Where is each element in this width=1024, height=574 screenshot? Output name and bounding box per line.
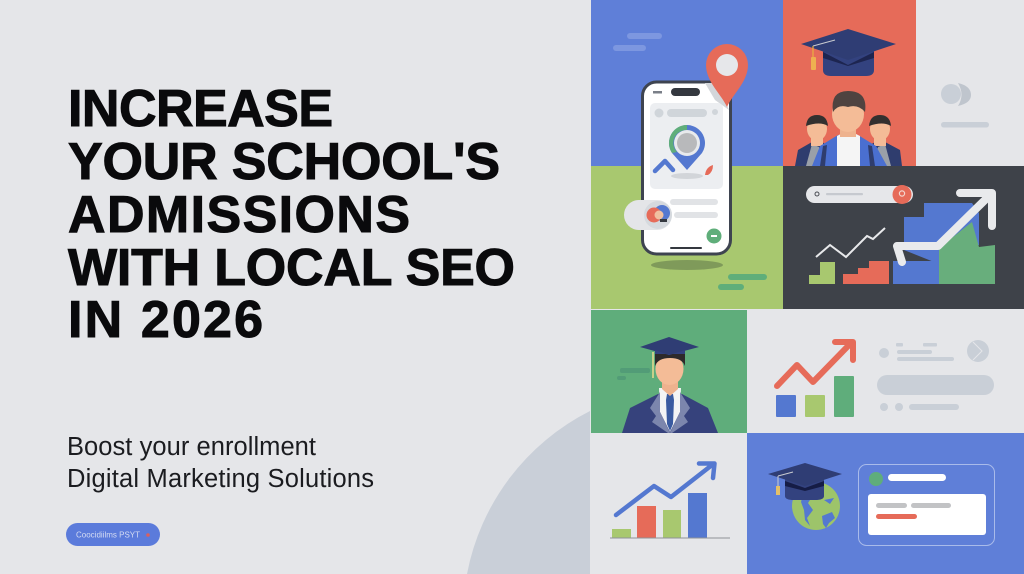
listing card [858, 464, 994, 546]
title: YOUR SCHOOL'S [68, 133, 500, 191]
analytics placeholder [877, 340, 994, 411]
line chart [816, 228, 885, 257]
icon: red location pin [706, 44, 748, 107]
panel: light gray top-right [916, 0, 1024, 166]
blue base [893, 261, 939, 284]
panel: light bottom chart background [591, 433, 747, 574]
tassel [652, 352, 654, 378]
tie [666, 394, 674, 431]
call to action button: Coocidiilms PSYT [76, 530, 140, 540]
blue stairs [904, 203, 979, 264]
subtitle [67, 433, 374, 493]
panel: light analytics background [747, 310, 1024, 433]
green block [939, 222, 995, 284]
mortarboard [640, 337, 699, 355]
subtitle: Boost your enrollment [67, 433, 316, 461]
tassel [777, 476, 779, 487]
title: INCREASE [68, 80, 333, 138]
phone body [642, 82, 730, 254]
title: WITH LOCAL SEO [68, 239, 515, 297]
hair [655, 352, 685, 366]
main student [812, 91, 887, 166]
search bar [806, 185, 913, 204]
lapels [650, 392, 690, 433]
green action button [706, 228, 722, 244]
icon: graduation cap with students [795, 29, 902, 166]
left student [795, 115, 835, 166]
suit [622, 394, 718, 433]
phone notch [671, 88, 700, 96]
map location icon [655, 125, 713, 179]
search bar in phone [654, 108, 718, 118]
globe [792, 482, 840, 530]
title: IN 2026 [68, 291, 263, 349]
panel: blue bottom-right background [747, 433, 1024, 574]
cap base [785, 478, 824, 500]
continents [801, 495, 835, 528]
chart: rising stairs and arrow [809, 193, 995, 284]
chart: red arrow and bars [776, 342, 854, 417]
title [68, 80, 515, 349]
home bar [670, 247, 702, 249]
avatar chip [624, 200, 672, 230]
dashes [617, 368, 650, 380]
graduation cap [801, 29, 896, 76]
pin fold shadow [705, 83, 729, 110]
white growth arrow [897, 193, 992, 262]
panel: red students [783, 0, 916, 166]
title: ADMISSIONS [68, 186, 410, 244]
right student [862, 115, 902, 166]
face [656, 353, 684, 385]
neck [662, 380, 678, 396]
subtitle: Digital Marketing Solutions [67, 465, 374, 493]
panel: green phone background [591, 166, 783, 309]
shirt [659, 388, 681, 432]
map card [650, 103, 723, 189]
icon: globe with graduation cap [768, 463, 842, 530]
phone shadow [651, 260, 723, 270]
red steps [843, 261, 889, 284]
phone with map [624, 82, 730, 270]
cap band [655, 350, 685, 355]
graduate [617, 337, 718, 433]
panel: green graduate background [591, 310, 747, 433]
green steps [809, 262, 835, 284]
list rows [670, 199, 718, 218]
status dots [653, 91, 662, 94]
panel: dark chart [783, 166, 1024, 309]
chart: blue arrow and bars [610, 464, 730, 538]
call to action button [66, 523, 160, 546]
background circle [467, 411, 590, 574]
panel: blue top-left [591, 0, 783, 166]
mortarboard [768, 463, 842, 486]
